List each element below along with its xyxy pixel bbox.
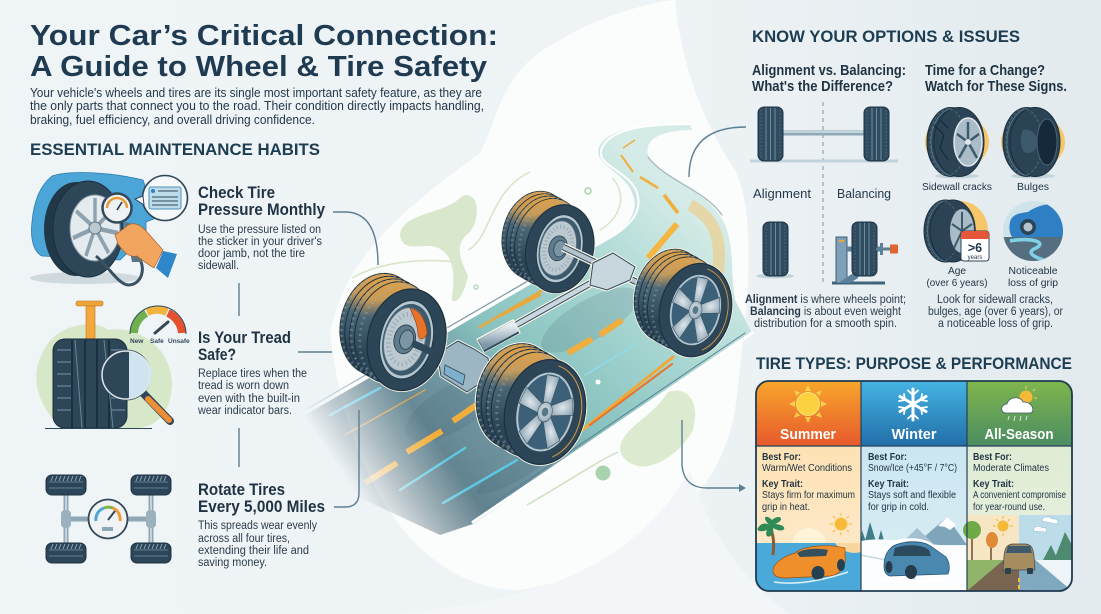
hand holding gauge bbox=[115, 222, 177, 278]
all-season text: A convenient compromise bbox=[973, 490, 1066, 501]
winter text: Snow/Ice (+45°F / 7°C) bbox=[868, 463, 957, 474]
habit: rotate tires: Every 5,000 Miles bbox=[198, 497, 325, 516]
all-season text: Moderate Climates bbox=[973, 463, 1049, 474]
habit: tread safe: wear indicator bars. bbox=[197, 405, 292, 417]
subheading: Alignment vs. Balancing: bbox=[752, 62, 906, 79]
habit: check tire pressure: sidewall. bbox=[198, 260, 239, 272]
panel: tire types table bbox=[756, 381, 1072, 591]
all-season text: Key Trait: bbox=[973, 479, 1014, 490]
tire front bbox=[45, 339, 152, 428]
intro paragraph bbox=[30, 86, 484, 127]
tire: age bbox=[924, 200, 989, 289]
subheading: Time for a Change? bbox=[925, 62, 1045, 79]
caption: a noticeable loss of grip. bbox=[938, 318, 1053, 330]
habit: check tire pressure: door jamb, not the tire bbox=[198, 248, 305, 260]
heading: tire types: TIRE TYPES: PURPOSE & PERFORMANCE bbox=[756, 354, 1072, 373]
caption: Look for sidewall cracks, bbox=[937, 294, 1053, 306]
orange road tail bbox=[690, 205, 719, 285]
calendar: >6 bbox=[968, 241, 982, 255]
summer text: Key Trait: bbox=[762, 479, 803, 490]
habit: check tire pressure bbox=[198, 183, 325, 272]
illustration: road and axle assembly bbox=[300, 124, 752, 535]
tire: sidewall cracks bbox=[922, 108, 992, 193]
subheading bbox=[752, 62, 906, 95]
road surface bbox=[300, 125, 752, 535]
connector lines bbox=[239, 127, 746, 507]
pressure gauge bbox=[102, 194, 132, 222]
habit: check tire pressure: the sticker in your driver's bbox=[198, 236, 322, 248]
icon: car wheel with pressure gauge bbox=[30, 173, 188, 285]
speed streaks bbox=[330, 290, 673, 503]
habit: tread safe: tread is worn down bbox=[198, 380, 289, 392]
grey car bbox=[1003, 544, 1035, 574]
caption bbox=[745, 294, 906, 330]
all-season text bbox=[973, 452, 1066, 513]
wear dial bbox=[130, 306, 190, 345]
road edge lines bbox=[300, 124, 752, 522]
icon: snowflake bbox=[899, 389, 927, 420]
intro paragraph: braking, fuel efficiency, and overall driving confidence. bbox=[30, 113, 315, 127]
winter text: for grip in cold. bbox=[868, 502, 929, 513]
caption: Balancing is about even weight bbox=[750, 306, 902, 318]
front right wheel bbox=[464, 334, 598, 474]
panel: signs of change bbox=[922, 62, 1067, 330]
habit: rotate tires: saving money. bbox=[198, 557, 267, 569]
green swirl blobs bbox=[352, 172, 695, 505]
front axle and gearbox bbox=[408, 341, 491, 392]
title: Your Car’s Critical Connection: bbox=[30, 20, 498, 52]
column: all-season bbox=[963, 381, 1072, 591]
habit: rotate tires: across all four tires, bbox=[198, 533, 290, 545]
habit: check tire pressure: Use the pressure listed on bbox=[198, 224, 321, 236]
icon: sun bbox=[789, 385, 827, 423]
column: summer bbox=[756, 381, 861, 591]
road shadows bbox=[422, 288, 634, 484]
subheading bbox=[925, 62, 1067, 95]
caption bbox=[928, 294, 1063, 330]
rear right wheel bbox=[624, 240, 742, 366]
subheading: Watch for These Signs. bbox=[925, 78, 1067, 95]
column: all-season: All-Season bbox=[984, 426, 1054, 443]
balancing machine bbox=[832, 222, 898, 283]
tire: bulges bbox=[1001, 108, 1065, 193]
winter scene bbox=[861, 517, 967, 591]
tire: age: Age bbox=[948, 266, 966, 277]
tire: sidewall cracks: Sidewall cracks bbox=[922, 182, 992, 193]
column: summer: Summer bbox=[780, 426, 836, 443]
habit: rotate tires: Rotate Tires bbox=[198, 480, 285, 499]
caption: distribution for a smooth spin. bbox=[754, 318, 897, 330]
summer text: Warm/Wet Conditions bbox=[762, 463, 852, 474]
summer scene bbox=[756, 513, 861, 591]
orange sports car bbox=[773, 546, 848, 583]
habit: tread safe bbox=[197, 328, 307, 417]
heading: essential maintenance habits: ESSENTIAL MAINTENANCE HABITS bbox=[30, 140, 320, 159]
title: A Guide to Wheel & Tire Safety bbox=[30, 51, 487, 83]
habit: rotate tires bbox=[198, 480, 325, 569]
summer text: grip in heat. bbox=[762, 502, 810, 513]
blue car bbox=[884, 538, 950, 580]
circle: loss of grip: Noticeable bbox=[1008, 266, 1058, 277]
summer text: Best For: bbox=[762, 452, 801, 463]
front left wheel bbox=[328, 264, 458, 400]
winter text bbox=[868, 452, 957, 513]
icon: tread depth check bbox=[36, 301, 190, 428]
icon: tire rotation diagram bbox=[46, 475, 171, 563]
road lane dashes bbox=[365, 140, 678, 483]
habit: rotate tires: extending their life and bbox=[198, 545, 309, 557]
summer text: Stays firm for maximum bbox=[762, 490, 855, 501]
subheading: What's the Difference? bbox=[752, 78, 893, 95]
rear axle and differential bbox=[480, 247, 645, 346]
summer text bbox=[762, 452, 855, 513]
single tire bbox=[756, 222, 794, 278]
magnifier bbox=[102, 351, 170, 421]
rotation gauge bbox=[88, 500, 128, 538]
column: winter bbox=[861, 381, 967, 591]
winter text: Best For: bbox=[868, 452, 907, 463]
habit: check tire pressure: Pressure Monthly bbox=[198, 200, 325, 219]
panel: alignment vs balancing bbox=[745, 62, 906, 330]
door sticker bubble bbox=[135, 176, 188, 220]
calendar bbox=[961, 231, 989, 261]
winter text: Key Trait: bbox=[868, 479, 909, 490]
tire and rim bbox=[44, 181, 123, 277]
intro paragraph: Your vehicle's wheels and tires are its single most important safety feature, as they are bbox=[30, 86, 482, 100]
rear left wheel bbox=[492, 183, 604, 301]
wear dial: Safe bbox=[150, 338, 164, 345]
winter text: Stays soft and flexible bbox=[868, 490, 956, 501]
tire: age: (over 6 years) bbox=[926, 278, 988, 289]
wear dial: Unsafe bbox=[168, 338, 190, 345]
intro paragraph: the only parts that connect you to the road. Their condition directly impacts handling, bbox=[30, 99, 484, 113]
road with lanes bbox=[300, 124, 752, 535]
all-season text: Best For: bbox=[973, 452, 1012, 463]
car fender bbox=[31, 173, 156, 260]
habit: tread safe: Replace tires when the bbox=[198, 368, 307, 380]
column: winter: Winter bbox=[892, 426, 937, 443]
caption: bulges, age (over 6 years), or bbox=[928, 306, 1063, 318]
label balancing: Balancing bbox=[837, 186, 891, 201]
icon: cloud and sun bbox=[1002, 386, 1037, 421]
circle: loss of grip: loss of grip bbox=[1008, 278, 1058, 289]
hose bbox=[96, 256, 142, 285]
circle: loss of grip bbox=[1003, 201, 1066, 289]
all-season text: for year-round use. bbox=[973, 502, 1045, 513]
habit: tread safe: Safe? bbox=[198, 345, 236, 364]
hub axle stub bbox=[412, 343, 432, 352]
habit: tread safe: even with the built-in bbox=[198, 393, 300, 405]
caption: Alignment is where wheels point; bbox=[745, 294, 906, 306]
habit: tread safe: Is Your Tread bbox=[198, 328, 291, 347]
axle with two tires bbox=[750, 107, 898, 161]
label alignment: Alignment bbox=[753, 186, 811, 201]
habit: check tire pressure: Check Tire bbox=[198, 183, 275, 202]
habit: rotate tires: This spreads wear evenly bbox=[198, 520, 317, 532]
tread gauge tool bbox=[76, 301, 103, 346]
tire: bulges: Bulges bbox=[1017, 182, 1049, 193]
seasonal scene bbox=[963, 515, 1072, 591]
heading: know your options: KNOW YOUR OPTIONS & ISSUES bbox=[752, 27, 1020, 46]
title bbox=[30, 20, 498, 83]
calendar: years bbox=[968, 255, 982, 261]
orange brake caliper bbox=[410, 308, 427, 339]
wear dial: New bbox=[130, 338, 144, 345]
